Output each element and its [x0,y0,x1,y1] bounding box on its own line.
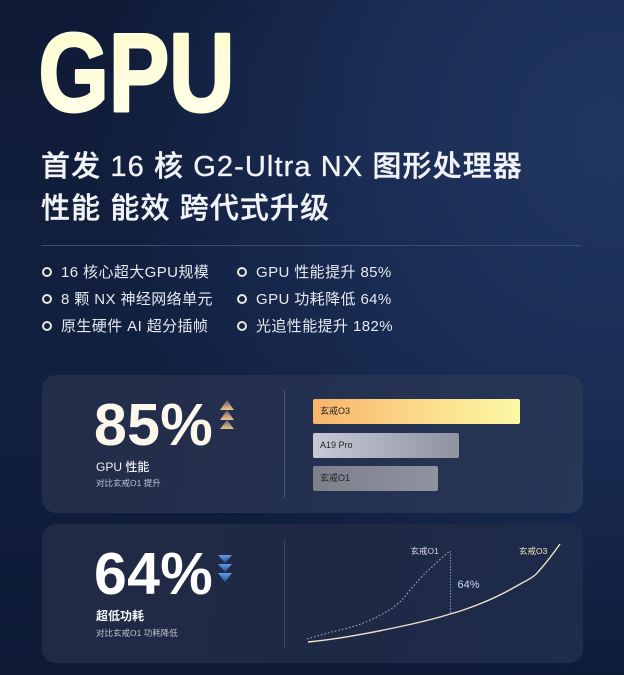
feature item [42,318,208,335]
bar: XRING O1 [313,466,438,491]
curve: XRING O1 dotted [307,551,450,639]
stat: 64%: 64% [94,541,213,607]
bar: XRING O1: 玄戒O1 [320,473,350,483]
feature list: right column: GPU 功耗降低 64% [256,291,392,308]
bar: A19 Pro [313,433,459,458]
feature item [237,318,393,335]
bar: XRING O3: 玄戒O3 [320,406,350,416]
feature item [42,264,209,281]
panel: GPU performance [42,375,583,513]
feature list: left column [42,264,213,335]
feature item [42,291,213,308]
bar chart: performance [313,399,520,491]
feature list: right column [237,264,393,335]
feature list: left column: 16 核心超大GPU规模 [61,264,209,281]
feature list: left column: 8 颗 NX 神经网络单元 [61,291,213,308]
note: power comparison: 对比玄戒O1 功耗降低 [96,628,178,638]
curve: XRING O3 [308,544,560,642]
feature item [237,291,392,308]
bar: XRING O3 [313,399,520,424]
label: XRING O3: 玄戒O3 [519,546,548,556]
feature item [237,264,392,281]
label: ultra low power: 超低功耗 [96,609,144,623]
stat: 85%: 85% [94,392,213,458]
bar: A19 Pro: A19 Pro [320,440,353,450]
feature list: right column: GPU 性能提升 85% [256,264,392,281]
feature list: right column: 光追性能提升 182% [256,318,393,335]
label: 64%: 64% [458,579,480,591]
heading line 1: 首发 16 核 G2-Ultra NX 图形处理器 [41,151,523,183]
heading line 2: 性能 能效 跨代式升级 [41,193,330,225]
marker: difference line [450,551,452,614]
label: GPU performance: GPU 性能 [96,460,149,474]
label: XRING O1: 玄戒O1 [410,546,439,556]
feature list: left column: 原生硬件 AI 超分插帧 [61,318,208,335]
note: performance comparison: 对比玄戒O1 提升 [96,478,161,488]
title: GPU: GPU [38,11,234,135]
panel: low power [42,524,583,663]
